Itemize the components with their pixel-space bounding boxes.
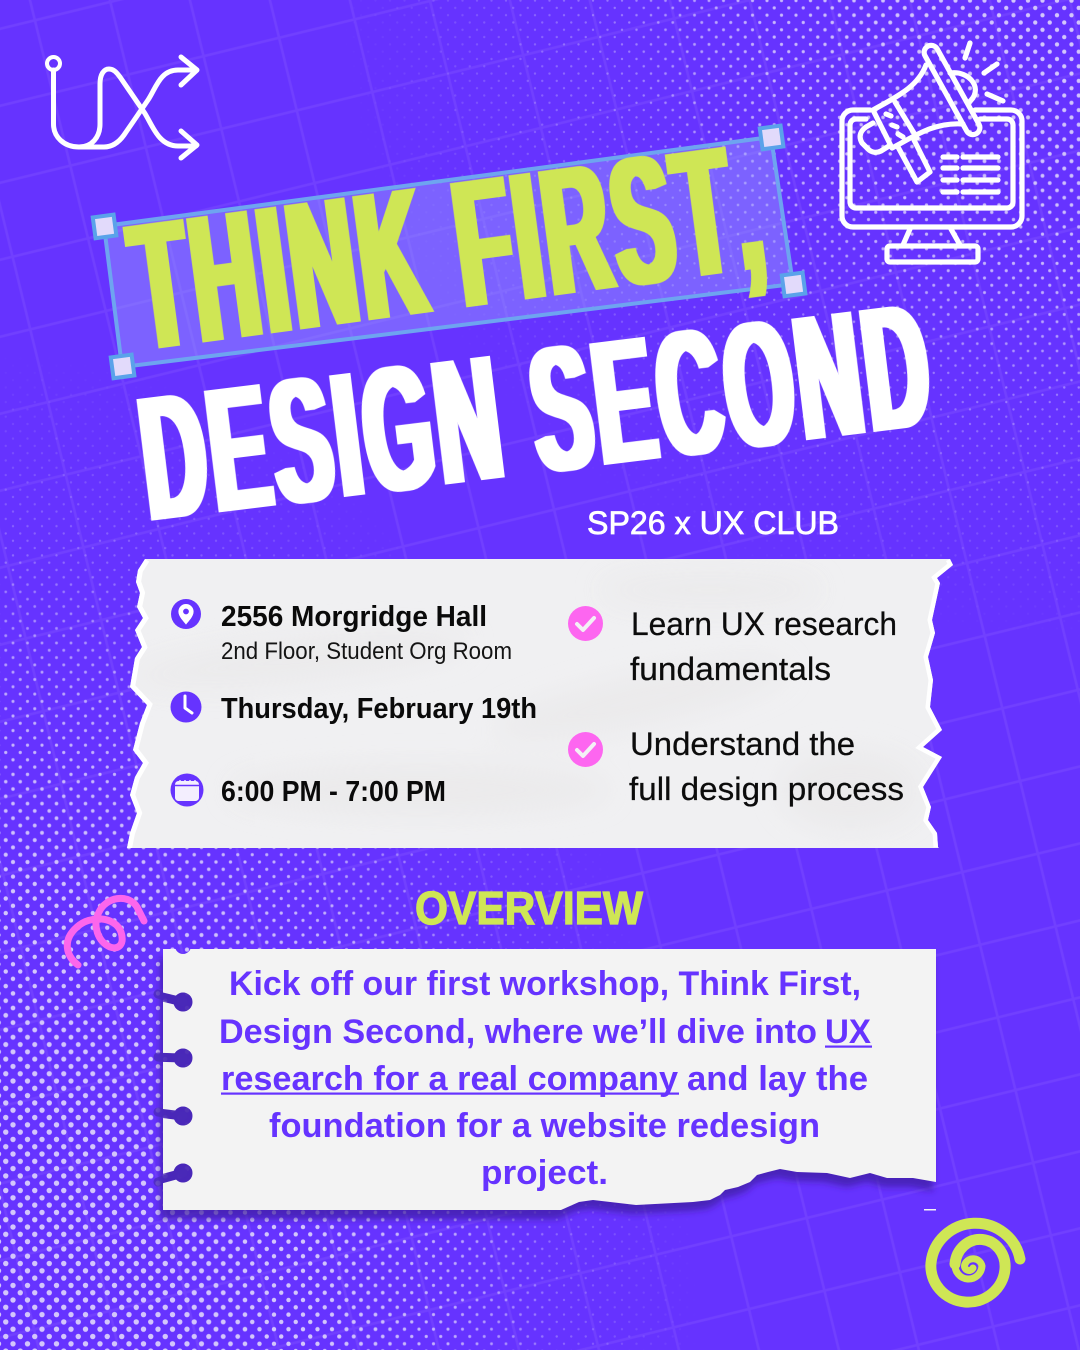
icon: pink squiggle [67,898,144,965]
icon: calendar [170,774,204,806]
subtitle: SP26 x UX CLUB [587,505,839,541]
icon: location pin [171,599,201,629]
icon: check two [568,732,603,767]
overview body text: Design Second, where we’ll dive into [219,1013,817,1051]
overview body text: research for a real company [221,1060,678,1098]
icon: UX logo [47,57,197,158]
overview heading: OVERVIEW [415,882,644,934]
overview body text: and lay the [687,1060,868,1098]
overview body text: project. [481,1154,608,1192]
learning goal one: Learn UX research [631,606,897,642]
icon: check one [568,606,603,641]
title: design second: DESIGN SECOND [130,264,944,559]
date: Thursday, February 19th [221,693,537,725]
overview body text: foundation for a website redesign [269,1107,820,1145]
panel: event details [127,559,953,848]
learning goal two [629,726,904,807]
icon: megaphone and monitor [842,43,1022,262]
location title: 2556 Morgridge Hall [221,601,487,633]
overview body text: UX [825,1013,871,1051]
overview body text [219,965,872,1192]
location detail: 2nd Floor, Student Org Room [221,638,512,665]
learning goal one [630,606,897,687]
title: think first: THINK FIRST, [121,104,778,390]
learning goal one: fundamentals [630,651,831,687]
icon: lime spiral [931,1223,1020,1302]
learning goal two: Understand the [630,726,855,762]
learning goal two: full design process [629,771,904,807]
time: 6:00 PM - 7:00 PM [221,776,446,808]
panel: overview note [158,949,936,1219]
selection box [93,126,805,378]
icon: clock [170,692,202,722]
overview body text: Kick off our first workshop, Think First, [229,965,861,1003]
